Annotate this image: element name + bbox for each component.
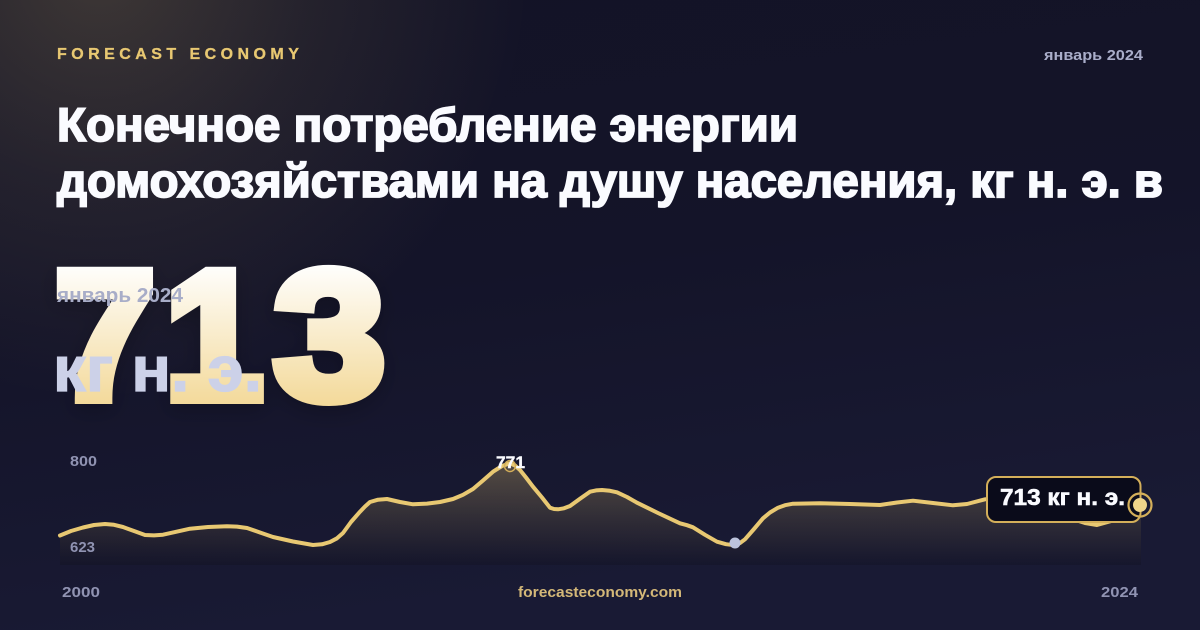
title	[57, 98, 1163, 207]
x axis start year: 2000	[62, 584, 100, 601]
peak marker	[504, 460, 516, 472]
brand label: FORECAST ECONOMY	[57, 46, 303, 63]
big value: 3	[274, 233, 385, 437]
source url: forecasteconomy.com	[518, 584, 682, 601]
title: домохозяйствами на душу населения, кг н. э. в	[57, 154, 1163, 207]
peak value: 771	[496, 453, 525, 472]
big value: 7	[55, 233, 155, 437]
current value callout	[987, 477, 1140, 522]
area fill	[60, 463, 1141, 565]
axis label: max: 800	[70, 454, 97, 470]
current value marker	[1128, 494, 1152, 516]
unit label over value: кг н. э.	[53, 333, 262, 405]
x axis end year: 2024	[1101, 584, 1139, 601]
current value callout: 713 кг н. э.	[1000, 484, 1125, 510]
trend line	[60, 463, 1141, 545]
axis label: min: 623	[70, 540, 95, 556]
title: Конечное потребление энергии	[57, 98, 798, 151]
period label over value: январь 2024	[56, 285, 184, 307]
big value: 1	[165, 233, 263, 437]
big value	[55, 233, 385, 437]
date top right: январь 2024	[1044, 47, 1144, 64]
line chart	[60, 463, 1141, 565]
minimum marker	[730, 538, 740, 548]
